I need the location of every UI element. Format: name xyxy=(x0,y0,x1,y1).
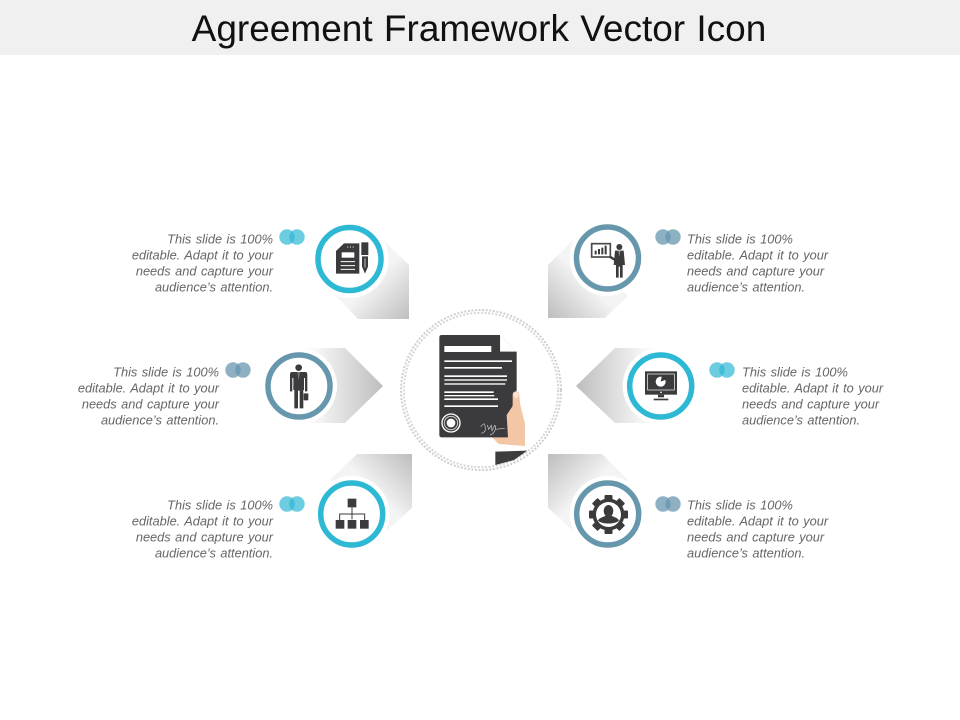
icon ring xyxy=(570,220,646,296)
text block xyxy=(687,498,829,560)
text block: This slide is 100% xyxy=(167,232,273,246)
text block xyxy=(78,364,220,428)
venn marker xyxy=(225,362,251,378)
text block xyxy=(742,364,884,428)
text block: editable. Adapt it to your xyxy=(687,248,829,262)
title bar xyxy=(0,0,960,55)
text block: editable. Adapt it to your xyxy=(132,514,274,528)
connector shape xyxy=(330,454,412,532)
venn marker xyxy=(279,229,305,245)
text block: audience’s attention. xyxy=(687,280,805,294)
icon ring xyxy=(570,476,646,552)
icon ring xyxy=(261,348,337,424)
connector shape xyxy=(548,240,628,318)
text block: needs and capture your xyxy=(136,264,274,278)
icon: businessman with briefcase xyxy=(290,364,308,408)
panel: bottom left item xyxy=(132,454,412,560)
panel: top left item xyxy=(132,220,409,319)
text block: audience’s attention. xyxy=(687,546,805,560)
text block: needs and capture your xyxy=(742,396,880,412)
venn marker xyxy=(655,229,681,245)
text block: This slide is 100% xyxy=(687,232,793,246)
icon ring xyxy=(623,348,699,424)
text block: editable. Adapt it to your xyxy=(687,514,829,528)
text block xyxy=(132,232,274,294)
icon: presenter with chart xyxy=(592,244,625,278)
text block: editable. Adapt it to your xyxy=(742,380,884,396)
icon: gear with person xyxy=(589,495,628,534)
panel: middle right item xyxy=(576,348,884,428)
text block: This slide is 100% xyxy=(742,364,848,380)
text block: This slide is 100% xyxy=(167,498,273,512)
text block: audience’s attention. xyxy=(155,280,273,294)
text block: audience’s attention. xyxy=(101,412,219,428)
icon: monitor with pie chart xyxy=(645,371,677,400)
text block: needs and capture your xyxy=(82,396,220,412)
text block xyxy=(132,498,274,560)
text block xyxy=(687,232,829,294)
icon: document and pen xyxy=(336,242,368,274)
text block: needs and capture your xyxy=(136,530,274,544)
panel: middle left item xyxy=(78,348,383,428)
venn marker xyxy=(655,496,681,512)
text block: editable. Adapt it to your xyxy=(132,248,274,262)
icon ring xyxy=(310,220,388,298)
connector shape xyxy=(300,348,383,423)
icon ring xyxy=(314,476,390,552)
text block: editable. Adapt it to your xyxy=(78,380,220,396)
text block: audience’s attention. xyxy=(155,546,273,560)
text block: This slide is 100% xyxy=(113,364,219,380)
central emblem: signed agreement in hand xyxy=(401,310,561,470)
text block: This slide is 100% xyxy=(687,498,793,512)
venn marker xyxy=(709,362,735,378)
title: Agreement Framework Vector Icon xyxy=(192,8,766,49)
text block: audience’s attention. xyxy=(742,412,860,428)
venn marker xyxy=(279,496,305,512)
connector shape xyxy=(330,237,409,319)
text block: needs and capture your xyxy=(687,530,825,544)
text block: needs and capture your xyxy=(687,264,825,278)
panel: top right item xyxy=(548,220,829,318)
connector shape xyxy=(548,454,628,532)
icon: org chart xyxy=(336,499,369,529)
panel: bottom right item xyxy=(548,454,829,560)
connector shape xyxy=(576,348,660,423)
